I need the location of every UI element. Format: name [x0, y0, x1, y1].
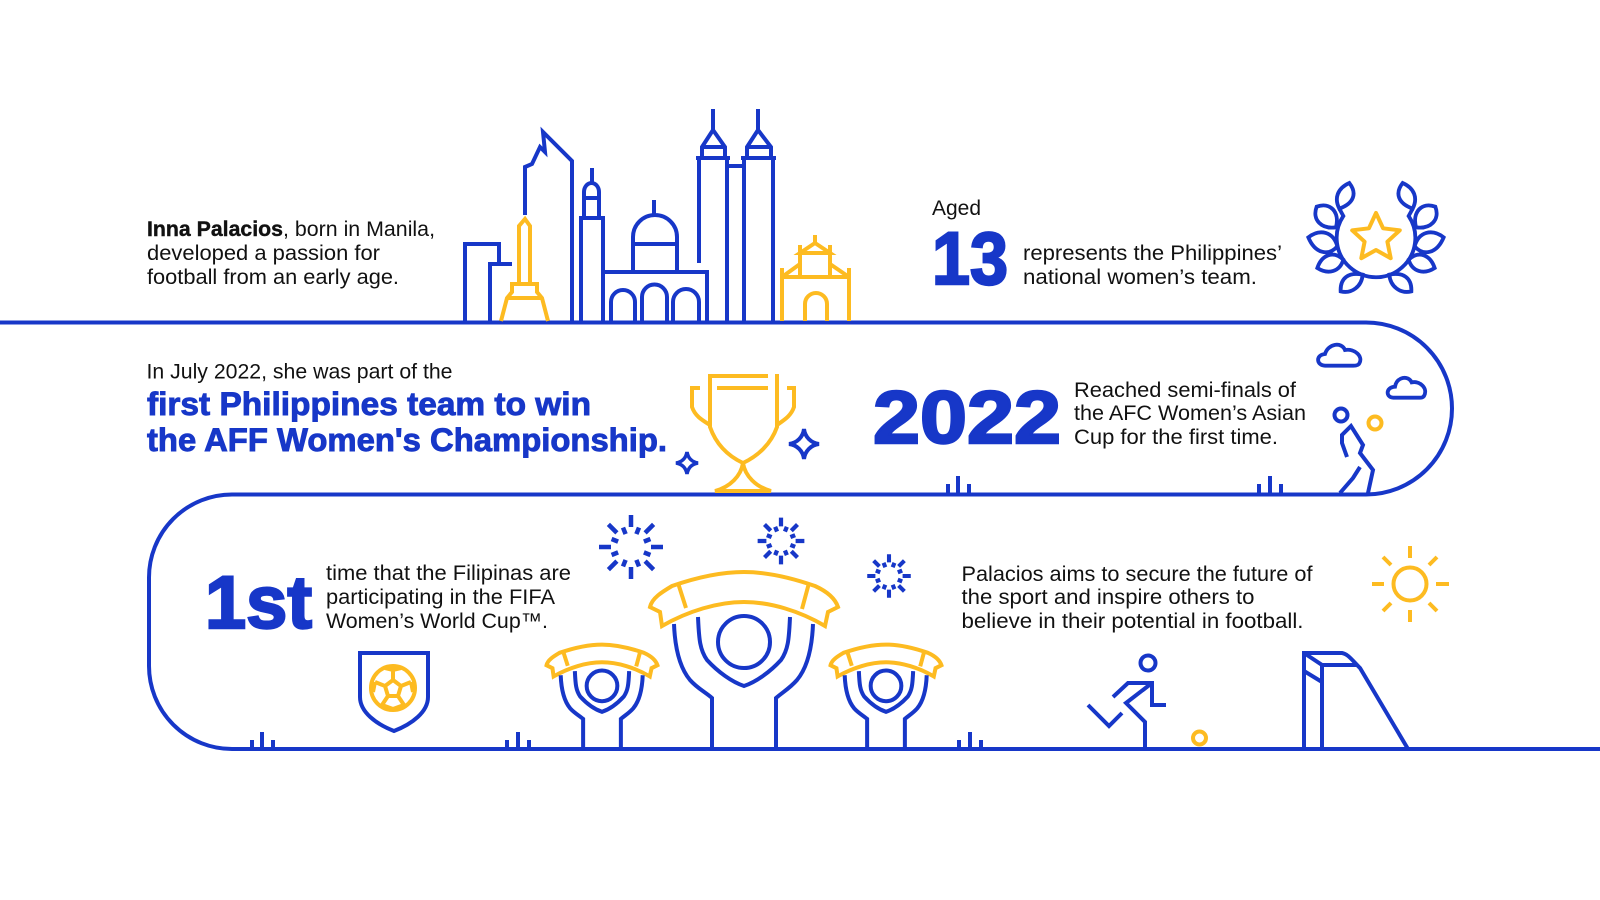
icon: trophy [692, 374, 794, 491]
text: 2022 semi-finals [873, 376, 1306, 459]
text: Aged 13: national women’s team. [1023, 265, 1257, 289]
fan: center [650, 572, 838, 749]
icon: clouds [1318, 345, 1425, 398]
building: yellow church [782, 235, 849, 321]
text: 1st: 1st [205, 561, 312, 644]
crowd: fans holding scarves [547, 572, 941, 749]
building: minaret [581, 168, 603, 321]
text: 1st: Women’s World Cup™. [326, 609, 548, 633]
grass ticks row 3 [252, 732, 981, 749]
text: Palacios aims: Palacios aims to secure the future of [962, 562, 1313, 586]
illustration: Manila skyline [465, 109, 849, 321]
text: Inna Palacios intro: football from an early age. [147, 265, 399, 289]
text: Aged 13: Aged [932, 196, 981, 220]
text: Aged 13: 13 [932, 217, 1008, 300]
monument: yellow obelisk [501, 219, 548, 321]
building: domed mosque [603, 200, 707, 321]
building: twin towers [696, 109, 776, 321]
building: tall angular tower [525, 132, 572, 321]
icon: footballer heading ball [1334, 408, 1382, 493]
text: Inna Palacios intro [147, 217, 435, 289]
fan: right [831, 645, 941, 749]
text: Aged 13: represents the Philippines’ [1023, 241, 1282, 265]
text: 2022 semi-finals: the AFC Women’s Asian [1074, 401, 1306, 425]
icon: goal [1304, 653, 1408, 749]
text: 1st: time that the Filipinas are [326, 561, 571, 585]
text: Inna Palacios intro: developed a passion for [147, 241, 380, 265]
building: left block [465, 244, 512, 321]
firework: center [758, 518, 804, 564]
icon: sun [1372, 546, 1449, 622]
text: 1st [205, 561, 571, 644]
text: 1st: participating in the FIFA [326, 585, 556, 609]
icon: laurel wreath with star [1308, 183, 1444, 292]
text: In July 2022 with highlighted heading: In July 2022, she was part of the [146, 360, 452, 384]
fan: left [547, 645, 657, 749]
text: Palacios aims: believe in their potential in football. [962, 609, 1304, 633]
text: In July 2022 with highlighted heading: the AFF Women's Championship. [147, 422, 667, 458]
icon: yellow ball [1193, 732, 1206, 744]
text: In July 2022 with highlighted heading: first Philippines team to win [147, 386, 591, 422]
icon: sparkle small [676, 452, 698, 474]
firework: left [599, 515, 663, 579]
icon: shield with football [360, 653, 428, 731]
text: Aged 13 [932, 196, 1282, 300]
icon: sparkle large [789, 429, 819, 459]
text: 2022 semi-finals: Reached semi-finals of [1074, 378, 1296, 402]
grass ticks row 2 [948, 476, 1281, 494]
fireworks [599, 515, 911, 598]
firework: right [867, 554, 911, 598]
text: 2022 semi-finals: 2022 [873, 376, 1061, 459]
road line: winding path [0, 322, 1600, 749]
icon: running player [1088, 656, 1166, 749]
text: 2022 semi-finals: Cup for the first time. [1074, 425, 1278, 449]
text: Palacios aims: the sport and inspire others to [962, 585, 1255, 609]
text: In July 2022 with highlighted heading [146, 360, 667, 458]
text: Inna Palacios intro: , born in Manila, [283, 217, 435, 241]
text: Inna Palacios intro: Inna Palacios [147, 217, 283, 241]
text: Palacios aims [962, 562, 1313, 633]
